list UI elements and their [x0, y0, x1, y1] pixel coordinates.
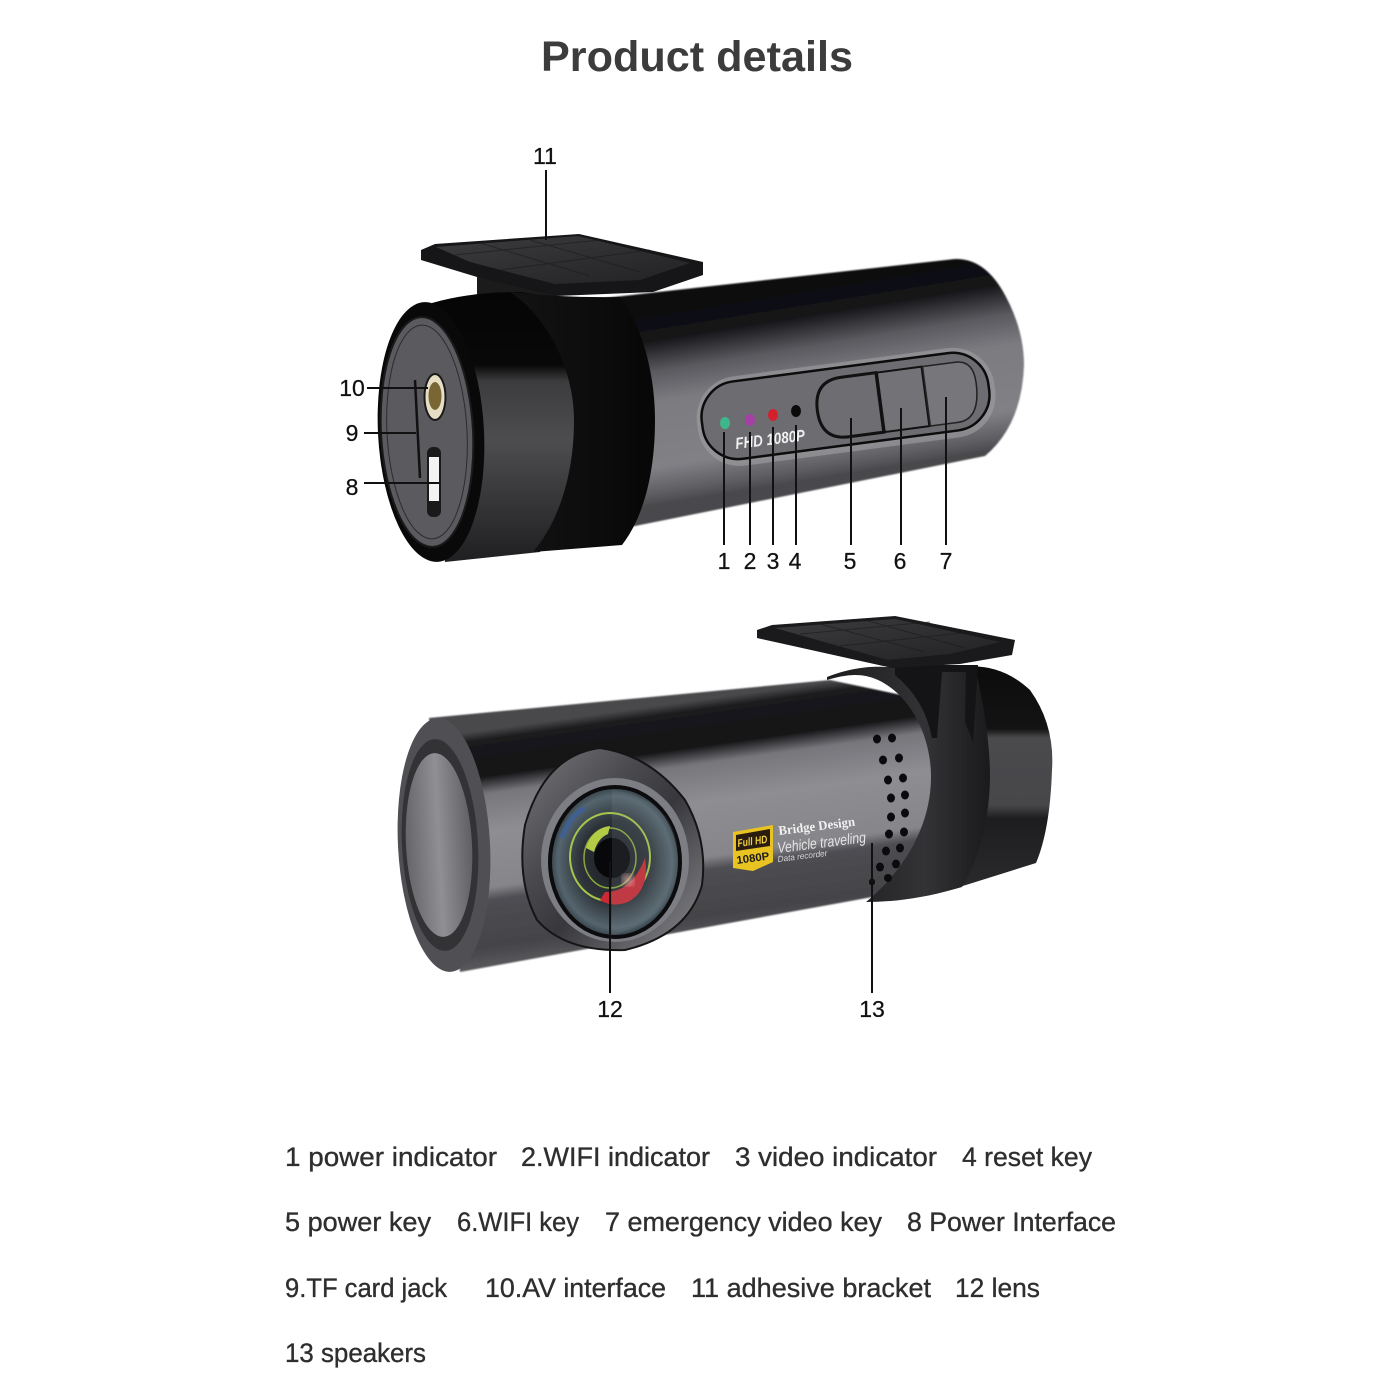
callout numbers rear view: 7	[940, 548, 952, 574]
leader lines for front view	[610, 843, 872, 993]
parts legend: 9.TF card jack	[285, 1273, 447, 1303]
Full HD 1080P badge	[733, 825, 773, 871]
parts legend	[285, 1142, 1116, 1368]
parts legend: 11 adhesive bracket	[691, 1273, 931, 1303]
parts legend: 4 reset key	[962, 1142, 1092, 1172]
parts legend: 3 video indicator	[735, 1142, 937, 1172]
speaker holes	[869, 734, 909, 886]
parts legend: 2.WIFI indicator	[521, 1142, 710, 1172]
adhesive bracket plate	[421, 234, 703, 296]
parts legend: 10.AV interface	[485, 1273, 666, 1303]
callout numbers rear view: 10	[339, 375, 365, 401]
parts legend: 12 lens	[955, 1273, 1040, 1303]
power interface port	[427, 447, 441, 517]
callout numbers front view	[597, 996, 885, 1022]
lens housing	[522, 748, 703, 950]
brand text: Vehicle traveling	[776, 829, 867, 857]
parts legend: 7 emergency video key	[605, 1207, 882, 1237]
rear cap section	[432, 292, 610, 562]
callout numbers rear view: 5	[844, 548, 856, 574]
callout numbers rear view: 6	[894, 548, 906, 574]
callout numbers front view: 12	[597, 996, 623, 1022]
title: Product details	[541, 33, 853, 81]
front view dash camera illustration	[391, 616, 1052, 974]
brand text	[776, 814, 867, 864]
rear cap section	[950, 666, 1052, 890]
callout numbers rear view: 8	[346, 474, 358, 500]
indicator lights	[720, 405, 801, 429]
rear face of camera	[371, 299, 491, 565]
camera body cylinder	[429, 680, 940, 972]
rotating band	[827, 667, 990, 902]
Full HD 1080P badge: 1080P	[736, 850, 770, 867]
parts legend: 1 power indicator	[285, 1142, 497, 1172]
rotating black band	[510, 292, 655, 552]
bracket neck	[895, 665, 978, 742]
callout numbers rear view	[339, 143, 952, 574]
FHD 1080P print: FHD 1080P	[734, 428, 806, 453]
parts legend: 13 speakers	[285, 1338, 426, 1368]
Full HD 1080P badge: Full HD	[737, 834, 768, 850]
leader lines for rear view	[364, 170, 946, 545]
callout numbers rear view: 1	[718, 548, 730, 574]
front ring and disc	[391, 716, 497, 974]
callout numbers rear view: 2	[744, 548, 756, 574]
parts legend: 6.WIFI key	[457, 1207, 579, 1237]
WIFI button	[877, 367, 929, 432]
camera body cylinder	[605, 259, 1024, 527]
AV interface jack	[424, 374, 446, 420]
callout numbers front view: 13	[859, 996, 885, 1022]
callout numbers rear view: 4	[789, 548, 802, 574]
TF card slot	[415, 380, 420, 478]
adhesive bracket plate	[757, 616, 1015, 668]
brand text: Bridge Design	[778, 814, 857, 838]
callout numbers rear view: 9	[346, 420, 358, 446]
rear view dash camera illustration	[371, 234, 1024, 565]
brand text: Data recorder	[777, 848, 829, 864]
parts legend: 5 power key	[285, 1207, 431, 1237]
power button	[813, 373, 884, 440]
callout numbers rear view: 11	[533, 143, 557, 169]
button and indicator panel	[692, 343, 1001, 471]
callout numbers rear view: 3	[767, 548, 779, 574]
lens	[541, 778, 689, 942]
parts legend: 8 Power Interface	[907, 1207, 1116, 1237]
bracket neck	[477, 270, 560, 300]
emergency video button	[923, 360, 981, 426]
